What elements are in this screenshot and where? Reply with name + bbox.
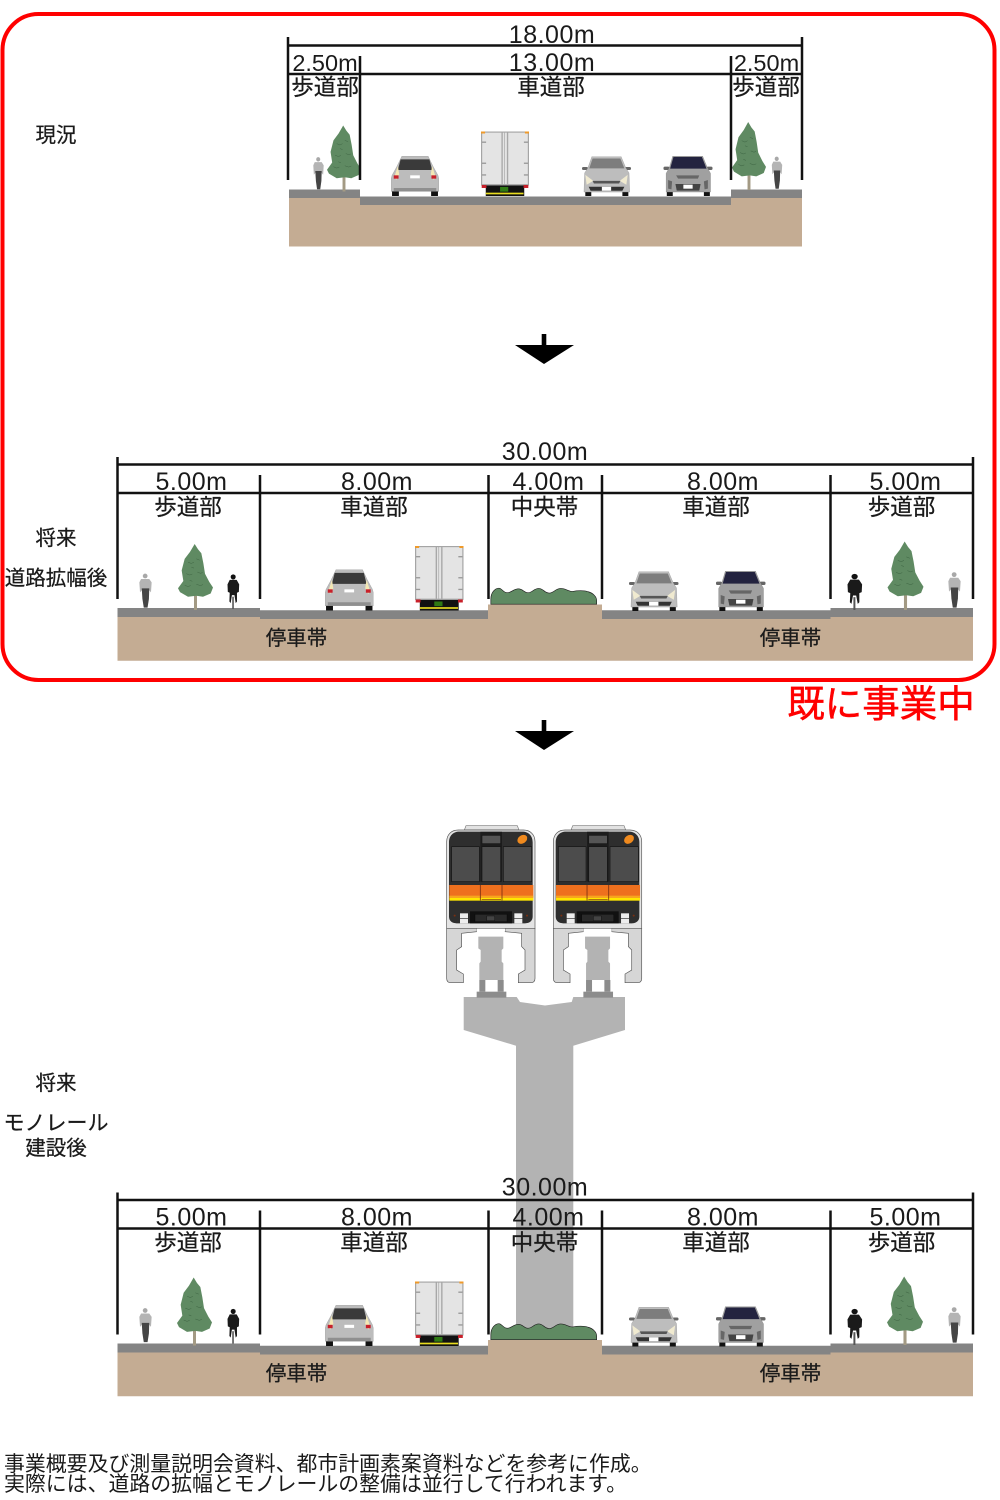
heading: 将来 道路拡幅後	[5, 527, 107, 590]
panel: current cross-section	[288, 21, 802, 246]
label: left carriageway: 車道部	[340, 1230, 408, 1256]
ground	[118, 1340, 973, 1396]
heading: 将来 モノレール建設後	[4, 1072, 108, 1160]
footnote: 事業概要及び測量説明会資料、都市計画素案資料などを参考に作成。	[4, 1453, 652, 1476]
dimension lines	[288, 37, 802, 180]
dimension: left carriageway: 8.00m	[341, 1204, 413, 1232]
label: left sidewalk: 歩道部	[154, 495, 222, 520]
icon: tree right	[732, 122, 766, 190]
dimension: left carriageway: 8.00m	[341, 468, 413, 496]
icon: cyclist right	[848, 1309, 862, 1345]
icon: car front dark	[716, 571, 766, 611]
dimension: right sidewalk: 2.50m	[734, 50, 799, 76]
icon: pedestrian right	[772, 157, 782, 189]
panel: frame of sections already under construction	[2, 14, 994, 680]
dimension: total width: 30.00m	[502, 438, 588, 466]
icon: cyclist	[228, 574, 239, 609]
dimension: right carriageway: 8.00m	[687, 468, 759, 496]
icon: tree	[177, 1278, 212, 1346]
arrow	[515, 334, 574, 364]
panel: widened road cross-section	[118, 438, 973, 661]
icon: tree	[178, 544, 213, 610]
label: right parking lane: 停車帯	[760, 627, 821, 650]
footnote	[4, 1453, 652, 1496]
label: left parking lane: 停車帯	[266, 1362, 327, 1386]
label: right parking lane: 停車帯	[760, 1362, 821, 1386]
dimension: left sidewalk: 5.00m	[156, 468, 227, 496]
icon: tree right	[888, 542, 924, 610]
heading: 将来 モノレール建設後: 将来	[36, 1072, 76, 1095]
dimension: median: 4.00m	[513, 1204, 584, 1232]
label: median: 中央帯	[511, 495, 578, 520]
heading: 将来 モノレール建設後: モノレール	[4, 1112, 108, 1135]
label: right sidewalk: 歩道部	[732, 75, 800, 100]
dimension: left sidewalk: 5.00m	[156, 1204, 227, 1232]
icon: truck	[481, 132, 529, 196]
icon: median shrubs	[491, 588, 597, 604]
dimension: right sidewalk: 5.00m	[870, 1204, 941, 1232]
heading: 将来 モノレール建設後: 建設後	[25, 1137, 87, 1160]
label: left carriageway: 車道部	[340, 495, 408, 520]
icon: pedestrian	[139, 1308, 152, 1342]
dimension: total width: 18.00m	[509, 21, 595, 49]
icon: truck	[415, 1282, 464, 1346]
label: right carriageway: 車道部	[682, 495, 750, 520]
label: left parking lane: 停車帯	[266, 627, 327, 650]
dimension: right carriageway: 8.00m	[687, 1204, 759, 1232]
ground	[289, 198, 802, 246]
icon: car front dark	[716, 1306, 766, 1346]
label: right sidewalk: 歩道部	[868, 495, 935, 520]
label: right carriageway: 車道部	[682, 1230, 750, 1256]
pavement	[289, 190, 802, 205]
icon: car front	[582, 156, 631, 196]
label: carriageway: 車道部	[517, 75, 585, 100]
label: left sidewalk: 歩道部	[291, 75, 359, 100]
icon: pedestrian	[313, 157, 324, 189]
icon: pedestrian right	[948, 572, 961, 608]
dimension: median: 4.00m	[513, 468, 584, 496]
dimension lines	[118, 457, 973, 599]
icon: tree right	[887, 1276, 923, 1345]
icon: median shrubs	[491, 1324, 597, 1340]
label: median: 中央帯	[511, 1230, 578, 1256]
ground	[118, 604, 973, 661]
icon: tree	[327, 126, 361, 192]
icon: car rear	[391, 156, 439, 196]
dimension: total width: 30.00m	[502, 1174, 588, 1202]
heading: 将来 道路拡幅後: 将来	[36, 527, 76, 550]
panel: cross-section after monorail	[118, 1174, 973, 1396]
label: left sidewalk: 歩道部	[154, 1230, 222, 1256]
icon: truck	[415, 546, 464, 610]
icon: car front	[629, 1307, 678, 1346]
icon: pedestrian	[139, 574, 152, 608]
icon: car front dark	[664, 156, 712, 196]
icon: car rear	[325, 1305, 374, 1346]
label: right sidewalk: 歩道部	[868, 1230, 935, 1256]
label: 既に事業中: 既に事業中	[787, 683, 975, 725]
icon: car front	[629, 572, 678, 611]
icon: car rear	[325, 570, 374, 610]
icon: pedestrian right	[948, 1307, 961, 1343]
dimension: right sidewalk: 5.00m	[870, 468, 941, 496]
pavement	[118, 1344, 973, 1354]
monorail pier	[464, 997, 625, 1340]
icon: cyclist right	[848, 574, 862, 610]
arrow	[515, 720, 574, 750]
dimension: carriageway: 13.00m	[509, 49, 595, 77]
footnote: 実際には、道路の拡幅とモノレールの整備は並行して行われます。	[4, 1473, 627, 1496]
dimension: left sidewalk: 2.50m	[292, 50, 358, 76]
icon: monorail train left	[447, 826, 535, 998]
heading: 将来 道路拡幅後: 道路拡幅後	[5, 567, 107, 590]
icon: cyclist	[228, 1309, 239, 1344]
pavement	[118, 608, 973, 619]
dimension lines	[118, 1192, 973, 1334]
icon: monorail train right	[553, 826, 642, 998]
heading: 現況: 現況	[36, 124, 76, 147]
